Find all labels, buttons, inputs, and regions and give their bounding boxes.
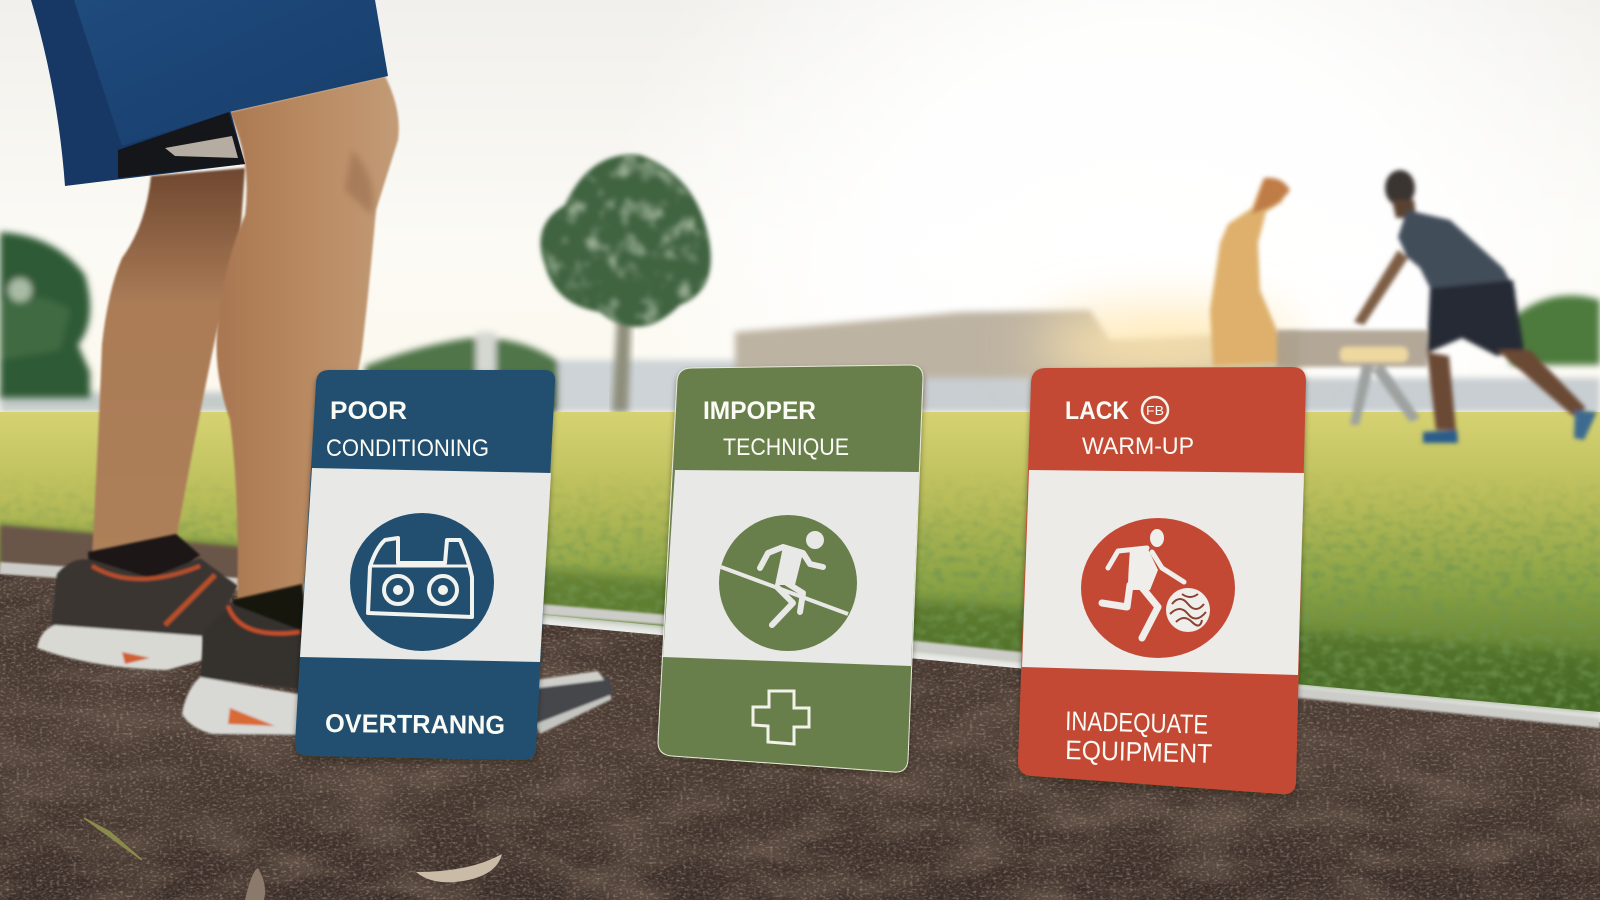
icon: green circle with stumbling runner [719,515,857,651]
badge in heading [1142,397,1168,423]
heading: lack: LACK [1065,397,1129,425]
heading: technique: TECHNIQUE [723,434,849,461]
far leg [92,168,245,556]
heading: conditioning: CONDITIONING [326,435,489,462]
heading: poor: POOR [330,397,407,425]
near leg [216,76,399,600]
blurred athlete, silhouette in sun [1210,178,1290,366]
card body, navy [295,370,555,760]
near shoe [182,584,613,735]
background tree, centre [540,155,711,412]
foreground legs and shoes [31,0,613,735]
dirt track [0,525,1600,900]
heading: warm-up: WARM-UP [1082,433,1194,460]
far shoe [37,534,238,670]
grass field [0,412,1600,712]
card body, green [658,365,923,772]
card body, red [1018,367,1306,794]
distant trees and buildings [0,296,1600,412]
sky background [0,0,1600,430]
card: poor conditioning / overtraining [295,370,555,760]
shorts [31,0,245,186]
white centre band [300,468,551,662]
debris: grass blade and leaves [84,818,502,900]
heading: impoper: IMPOPER [703,397,816,425]
white centre band [663,470,919,666]
icon: red circle with runner and ball [1081,518,1235,658]
card: improper technique [658,365,923,772]
label: equipment: EQUIPMENT [1065,735,1213,769]
label: overtraining: OVERTRANNG [325,708,505,740]
icon: outline medical cross [753,691,809,744]
blurred athlete in grey shirt [1277,170,1597,443]
background tree, left [0,232,90,398]
badge in heading: FB [1146,403,1164,418]
icon: blue circle with machine [350,513,494,651]
card: lack of warm-up / inadequate equipment [1018,367,1306,794]
white centre band [1022,470,1304,675]
label: inadequate: INADEQUATE [1065,706,1209,740]
white track curb [0,562,1600,728]
sun glow on horizon [1035,313,1295,377]
